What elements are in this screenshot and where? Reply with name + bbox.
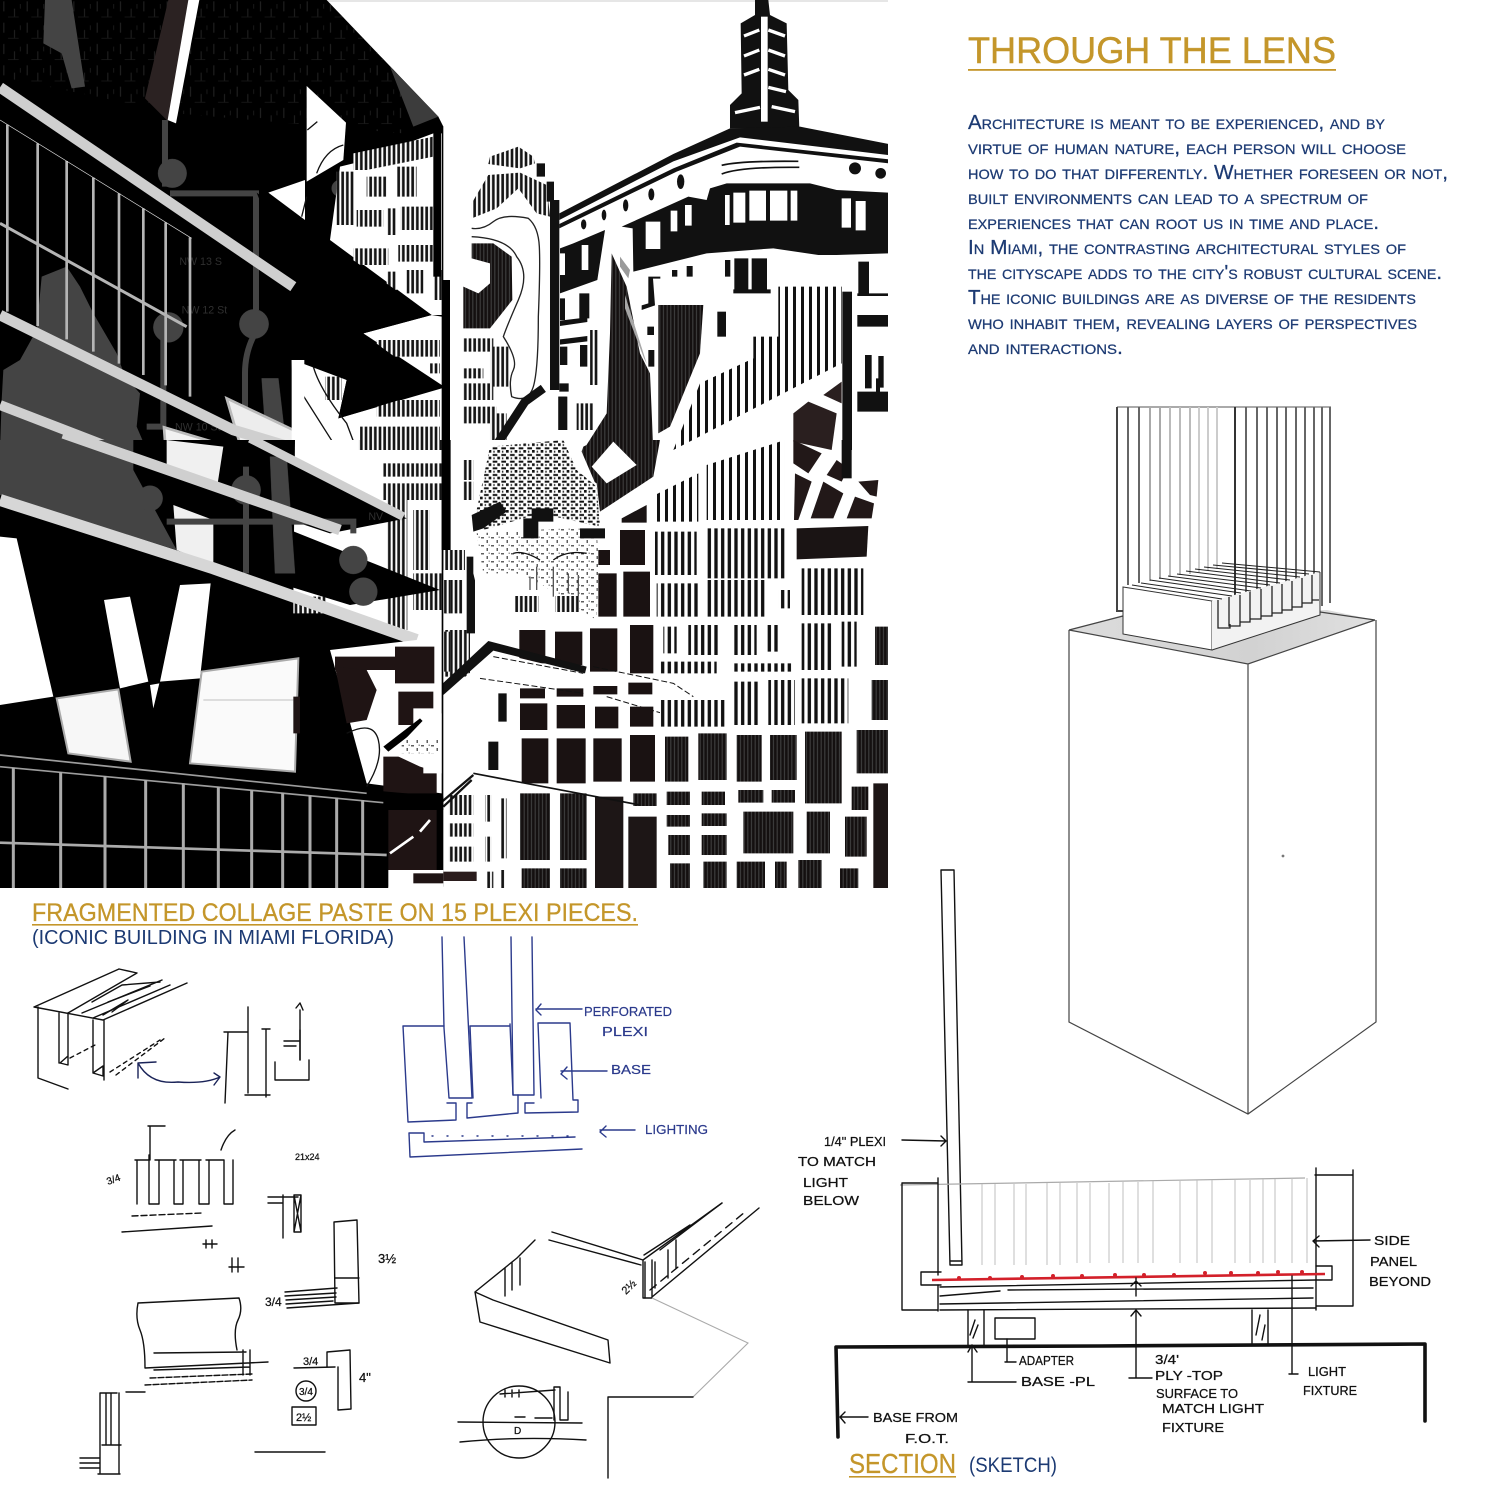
sketch: perspective corner study xyxy=(475,1203,759,1363)
pedestal xyxy=(1069,610,1376,1114)
sketch: section through display base: BELOW xyxy=(803,1193,860,1208)
plexi fins xyxy=(1117,407,1331,619)
collage: V letterform and lower facade: NV xyxy=(368,511,384,523)
sketch: isometric top-left study xyxy=(34,969,309,1103)
heading: collage caption: (ICONIC BUILDING IN MIAMI FLORIDA) xyxy=(32,927,394,949)
sketch: section through display base: BASE FROM xyxy=(873,1410,958,1425)
collage: window grid xyxy=(0,125,190,397)
text block: introduction: The iconic buildings are as diverse of the residents xyxy=(968,287,1416,309)
sketch: section through display base: 1/4" PLEXI xyxy=(824,1134,886,1149)
sketch: section through display base: ADAPTER xyxy=(1019,1353,1074,1368)
sketch: section through display base: BEYOND xyxy=(1369,1274,1431,1289)
sketch: bottom-left post xyxy=(80,1393,121,1474)
text block: introduction: virtue of human nature, each person will choose xyxy=(968,137,1406,159)
collage: lower curtain wall xyxy=(0,791,444,888)
sketch: 4 inch detail: 3/4 xyxy=(303,1356,318,1368)
sketch: blue plexi base detail: PLEXI xyxy=(602,1024,648,1039)
collage: dark glass facade upper left: NW 12 St xyxy=(182,304,227,316)
heading: section caption xyxy=(849,1448,1057,1479)
text block: introduction: who inhabit them, revealing layers of perspectives xyxy=(968,312,1417,334)
sketch: 4 inch detail: 2½ xyxy=(296,1412,311,1424)
sketch: section through display base: F.O.T. xyxy=(905,1431,949,1446)
heading: collage caption: FRAGMENTED COLLAGE PASTE ON 15 PLEXI PIECES. xyxy=(32,899,638,927)
sketch: 4 inch detail: 3/4 xyxy=(299,1387,313,1398)
sketch: circle detail: D xyxy=(514,1426,521,1437)
sketch: faint corner lines xyxy=(608,1298,748,1478)
text block: introduction xyxy=(968,112,1448,359)
collage: dark glass facade upper left xyxy=(0,0,450,450)
sketch: section through display base: PLY -TOP xyxy=(1155,1368,1223,1383)
heading: section caption: SECTION xyxy=(849,1448,956,1479)
sketch: small joint details xyxy=(265,1195,396,1309)
3D drawing: plexi fins on pedestal xyxy=(1069,407,1376,1114)
sketch: section through display base: MATCH LIGHT xyxy=(1162,1401,1264,1416)
title: THROUGH THE LENS xyxy=(968,30,1336,71)
sketch: section through display base: SIDE xyxy=(1374,1233,1410,1248)
heading: section caption: (SKETCH) xyxy=(969,1454,1057,1477)
text block: introduction: the cityscape adds to the city's robust cultural scene. xyxy=(968,262,1442,284)
sketch: section through display base: TO MATCH xyxy=(798,1154,876,1169)
sketch: blue plexi base detail: LIGHTING xyxy=(645,1122,708,1137)
sketch: comb section: 21x24 xyxy=(295,1152,320,1162)
collage: dark glass facade upper left: NW 10 St xyxy=(175,422,221,434)
leader arrows xyxy=(840,1136,1370,1423)
sketch: perspective corner study: 2½ xyxy=(620,1278,639,1297)
sketch: blue plexi base detail: BASE xyxy=(611,1062,651,1077)
collage: dark glass facade upper left: NW 13 S xyxy=(179,256,222,268)
panel: fragmented collage of Miami buildings xyxy=(0,0,888,888)
text block: introduction: built environments can lead to a spectrum of xyxy=(968,187,1368,209)
sketch: section through display base: SURFACE TO xyxy=(1156,1386,1238,1401)
sketch: section through display base: LIGHT xyxy=(1308,1364,1346,1379)
text block: introduction: Architecture is meant to be experienced, and by xyxy=(968,112,1386,134)
sketch: small joint details: 3/4 xyxy=(265,1295,282,1309)
sketch: wavy base section xyxy=(126,1298,268,1392)
sketch: 4 inch detail: 4" xyxy=(359,1370,371,1385)
text block: introduction: experiences that can root us in time and place. xyxy=(968,212,1379,234)
sketch: section through display base xyxy=(798,870,1431,1446)
text block: introduction: how to do that differently. Whether foreseen or not, xyxy=(968,162,1448,184)
sketch: section through display base: 3/4' xyxy=(1155,1352,1179,1367)
collage: hatched street grid and ornate tower xyxy=(440,440,888,888)
text block: introduction: and interactions. xyxy=(968,337,1123,359)
sketch: small joint details: 3½ xyxy=(378,1251,396,1266)
sketch: section through display base: FIXTURE xyxy=(1303,1383,1357,1398)
collage: dark glass facade upper left: NW 11 St xyxy=(367,373,412,385)
ornate tower xyxy=(473,440,595,645)
collage: V letterform and lower facade xyxy=(0,433,450,888)
heading: collage caption xyxy=(32,899,638,949)
sketch: comb section xyxy=(105,1126,320,1272)
sketch: section through display base: LIGHT xyxy=(803,1175,848,1190)
ground line xyxy=(836,1344,1425,1437)
sketch: comb section: 3/4 xyxy=(105,1173,123,1188)
sketch: 4 inch detail xyxy=(255,1350,371,1452)
base block with slots xyxy=(1123,563,1320,650)
sketch: blue plexi base detail: PERFORATED xyxy=(584,1004,672,1019)
sketch: section through display base: PANEL xyxy=(1370,1254,1417,1269)
sketch: section through display base: FIXTURE xyxy=(1162,1420,1224,1435)
collage: art deco building upper right xyxy=(463,0,888,450)
sketch: blue plexi base detail xyxy=(403,937,708,1157)
text block: introduction: In Miami, the contrasting architectural styles of xyxy=(968,237,1406,259)
sketch: section through display base: BASE -PL xyxy=(1021,1374,1095,1389)
sketch: circle detail xyxy=(458,1386,586,1458)
